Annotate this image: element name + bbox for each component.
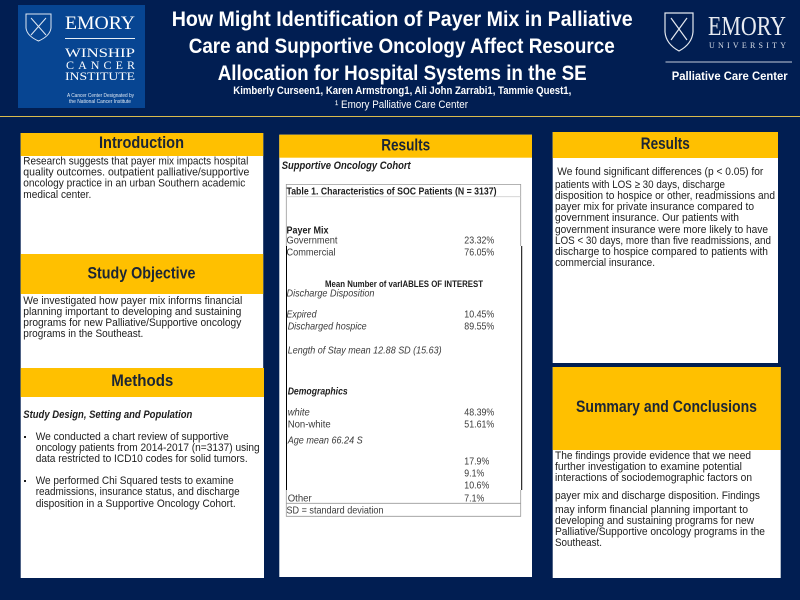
panel: introduction	[21, 133, 263, 254]
panel: summary and conclusions	[553, 367, 781, 578]
title	[172, 8, 633, 85]
logo: Emory Winship Cancer Institute: EMORY	[65, 13, 135, 34]
text: results body: discharge to hospice compared to patients with	[555, 246, 768, 258]
bullet: chi squared tests: We performed Chi Squared tests to examine	[36, 475, 234, 487]
text: study objective body: We investigated how payer mix informs financial	[23, 295, 242, 307]
logo: Emory Winship Cancer Institute: WINSHIP	[65, 45, 135, 60]
subheading: supportive oncology cohort: Supportive Oncology Cohort	[282, 160, 412, 172]
panel: results with table	[279, 135, 532, 577]
logo: Emory University Palliative Care Center: Palliative Care Center	[672, 69, 788, 83]
table 1: characteristics of SOC patients: Discharge Disposition	[286, 288, 375, 300]
text: introduction body: oncology practice in an urban Southern academic	[23, 178, 246, 190]
table 1: characteristics of SOC patients: Age mean 66.24 S	[287, 434, 363, 446]
text: conclusions body: may inform financial planning important to	[555, 504, 748, 516]
heading: study objective: Study Objective	[88, 264, 196, 282]
text: study objective body: programs in the Southeast.	[23, 328, 143, 340]
text: conclusions body: further investigation to examine potential	[555, 461, 742, 473]
text: study objective body: programs for new Palliative/Supportive oncology	[23, 317, 242, 329]
panel: results summary	[553, 132, 778, 363]
text: conclusions body: Palliative/Supportive oncology programs in the	[555, 526, 765, 538]
table 1: characteristics of SOC patients: 9.1%	[464, 468, 484, 480]
text: conclusions body: The findings provide evidence that we need	[555, 450, 751, 462]
text: results body: payer mix for private insurance compared to	[555, 201, 754, 213]
text: conclusions body: Southeast.	[555, 537, 602, 549]
table 1: characteristics of SOC patients: 48.39%	[464, 406, 494, 418]
text: introduction body	[23, 156, 249, 201]
bullet: chi squared tests: readmissions, insurance status, and discharge	[36, 486, 240, 498]
table 1: characteristics of SOC patients: 10.45%	[464, 308, 494, 320]
text: conclusions body: payer mix and discharge disposition. Findings	[555, 490, 760, 502]
text: results body	[555, 166, 775, 269]
table 1: characteristics of SOC patients: 10.6%	[464, 480, 489, 492]
logo: Emory University Palliative Care Center	[665, 11, 792, 83]
title: Allocation for Hospital Systems in the SE	[218, 62, 587, 85]
table 1: characteristics of SOC patients: 76.05%	[464, 246, 494, 258]
text: study objective body	[23, 295, 242, 340]
table 1: characteristics of SOC patients: 17.9%	[464, 456, 489, 468]
text: conclusions body: developing and sustaining programs for new	[555, 515, 754, 527]
text: results body: LOS < 30 days, more than five readmissions, and	[555, 235, 771, 247]
logo: Emory Winship Cancer Institute: the National Cancer Institute	[69, 99, 131, 105]
text: results body: patients with LOS ≥ 30 days, discharge	[555, 179, 725, 191]
table 1: characteristics of SOC patients: Commercial	[286, 246, 336, 258]
bullet: chart review	[24, 431, 260, 465]
table 1: characteristics of SOC patients: Payer Mix	[286, 224, 329, 236]
table 1: characteristics of SOC patients: Government	[286, 234, 338, 246]
icon: Emory shield	[665, 13, 693, 51]
table 1: characteristics of SOC patients: SD = standard deviation	[286, 504, 384, 516]
title: How Might Identification of Payer Mix in Palliative	[172, 8, 633, 31]
heading: results: Results	[381, 136, 430, 154]
table 1: characteristics of SOC patients	[286, 184, 522, 516]
icon: Winship shield	[26, 14, 51, 41]
authors: Kimberly Curseen1, Karen Armstrong1, Ali John Zarrabi1, Tammie Quest1,	[233, 85, 571, 97]
text: introduction body: quality outcomes. outpatient palliative/supportive	[23, 166, 249, 178]
table 1: characteristics of SOC patients: Expired	[286, 308, 317, 320]
heading: summary and conclusions: Summary and Conclusions	[576, 397, 757, 416]
table 1: characteristics of SOC patients: 89.55%	[464, 320, 494, 332]
table 1: characteristics of SOC patients: Non-white	[288, 418, 331, 430]
logo: Emory University Palliative Care Center: UNIVERSITY	[709, 41, 786, 50]
panel: study objective	[21, 254, 263, 368]
text: study objective body: planning important to developing and sustaining	[23, 306, 241, 318]
text: results body: We found significant differences (p < 0.05) for	[557, 166, 764, 178]
text: results body: government insurance. Our patients with	[555, 212, 739, 224]
heading: results: Results	[641, 134, 690, 153]
header banner	[18, 5, 792, 111]
logo: Emory Winship Cancer Institute: INSTITUTE	[65, 69, 135, 83]
bullet: chi squared tests	[24, 475, 240, 510]
heading: introduction: Introduction	[99, 133, 184, 152]
table 1: characteristics of SOC patients: Table 1. Characteristics of SOC Patients (N = 3137)	[286, 186, 496, 198]
table 1: characteristics of SOC patients: Mean Number of varIABLES OF INTEREST	[325, 279, 483, 290]
logo: Emory Winship Cancer Institute: A Cancer Center Designated by	[67, 93, 134, 99]
bullet: chart review: oncology patients from 2014-2017 (n=3137) using	[36, 442, 260, 454]
text: results body: disposition to hospice or other, readmissions and	[555, 190, 775, 202]
affiliation: ¹ Emory Palliative Care Center	[335, 99, 468, 111]
heading: methods: Methods	[111, 371, 173, 390]
table 1: characteristics of SOC patients: 51.61%	[464, 418, 494, 430]
text: introduction body: medical center.	[23, 189, 91, 201]
table 1: characteristics of SOC patients: Demographics	[288, 386, 348, 398]
text: results body: government insurance were more likely to have	[555, 224, 768, 236]
text: introduction body: Research suggests that payer mix impacts hospital	[23, 156, 248, 168]
text: results body: commercial insurance.	[555, 257, 655, 269]
bullet: chart review: data restricted to ICD10 codes for solid tumors.	[36, 453, 248, 465]
table 1: characteristics of SOC patients: Length of Stay mean 12.88 SD (15.63)	[288, 344, 442, 356]
text: conclusions body: interactions of sociodemographic factors on	[555, 472, 752, 484]
bullet: chart review: We conducted a chart review of supportive	[36, 431, 229, 443]
text: conclusions body	[555, 450, 765, 549]
table 1: characteristics of SOC patients: 23.32%	[464, 234, 494, 246]
table 1: characteristics of SOC patients: 7.1%	[464, 492, 484, 504]
table 1: characteristics of SOC patients: white	[288, 406, 310, 418]
subheading: study design: Study Design, Setting and Population	[23, 409, 193, 421]
logo: Emory Winship Cancer Institute	[18, 5, 145, 108]
table 1: characteristics of SOC patients: Other	[288, 492, 312, 504]
title: Care and Supportive Oncology Affect Resource	[189, 35, 615, 58]
panel: methods	[21, 368, 264, 578]
table 1: characteristics of SOC patients: Discharged hospice	[288, 320, 367, 332]
logo: Emory Winship Cancer Institute: CANCER	[66, 58, 135, 72]
bullet: chi squared tests: disposition in a Supportive Oncology Cohort.	[36, 498, 236, 510]
